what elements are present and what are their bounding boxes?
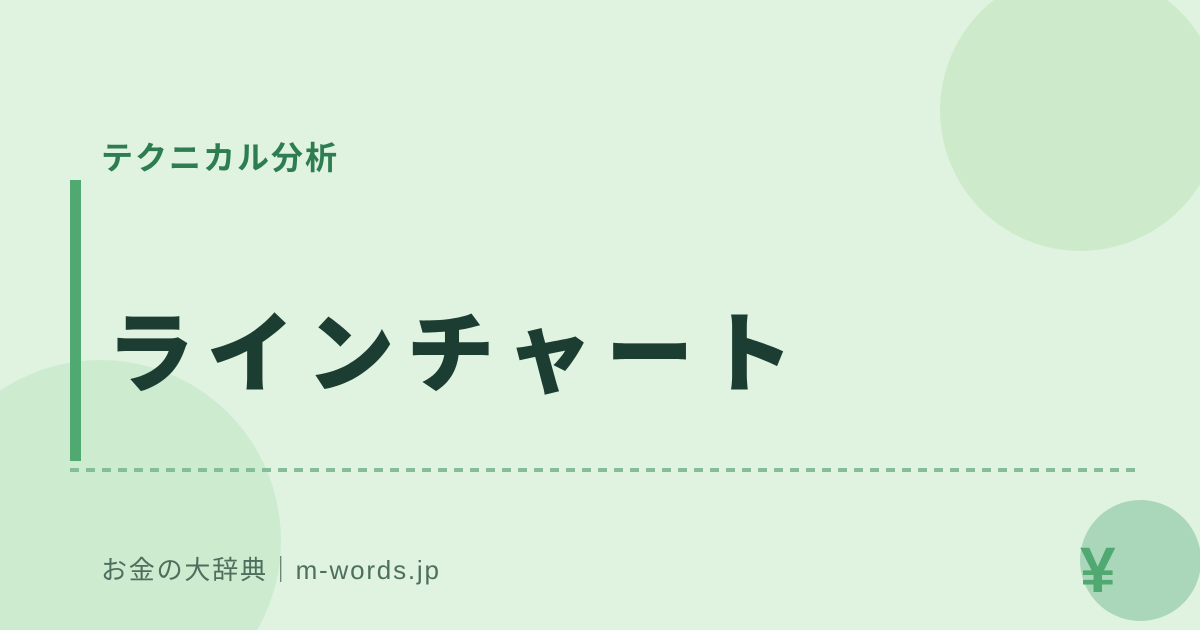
dashed divider: [70, 468, 1135, 472]
accent bar: [70, 180, 81, 461]
footer text: お金の大辞典｜m-words.jp: [101, 555, 441, 585]
title: ラインチャート: [106, 305, 806, 404]
category label: テクニカル分析: [101, 140, 339, 176]
icon: yen sign: ¥: [1080, 534, 1116, 606]
